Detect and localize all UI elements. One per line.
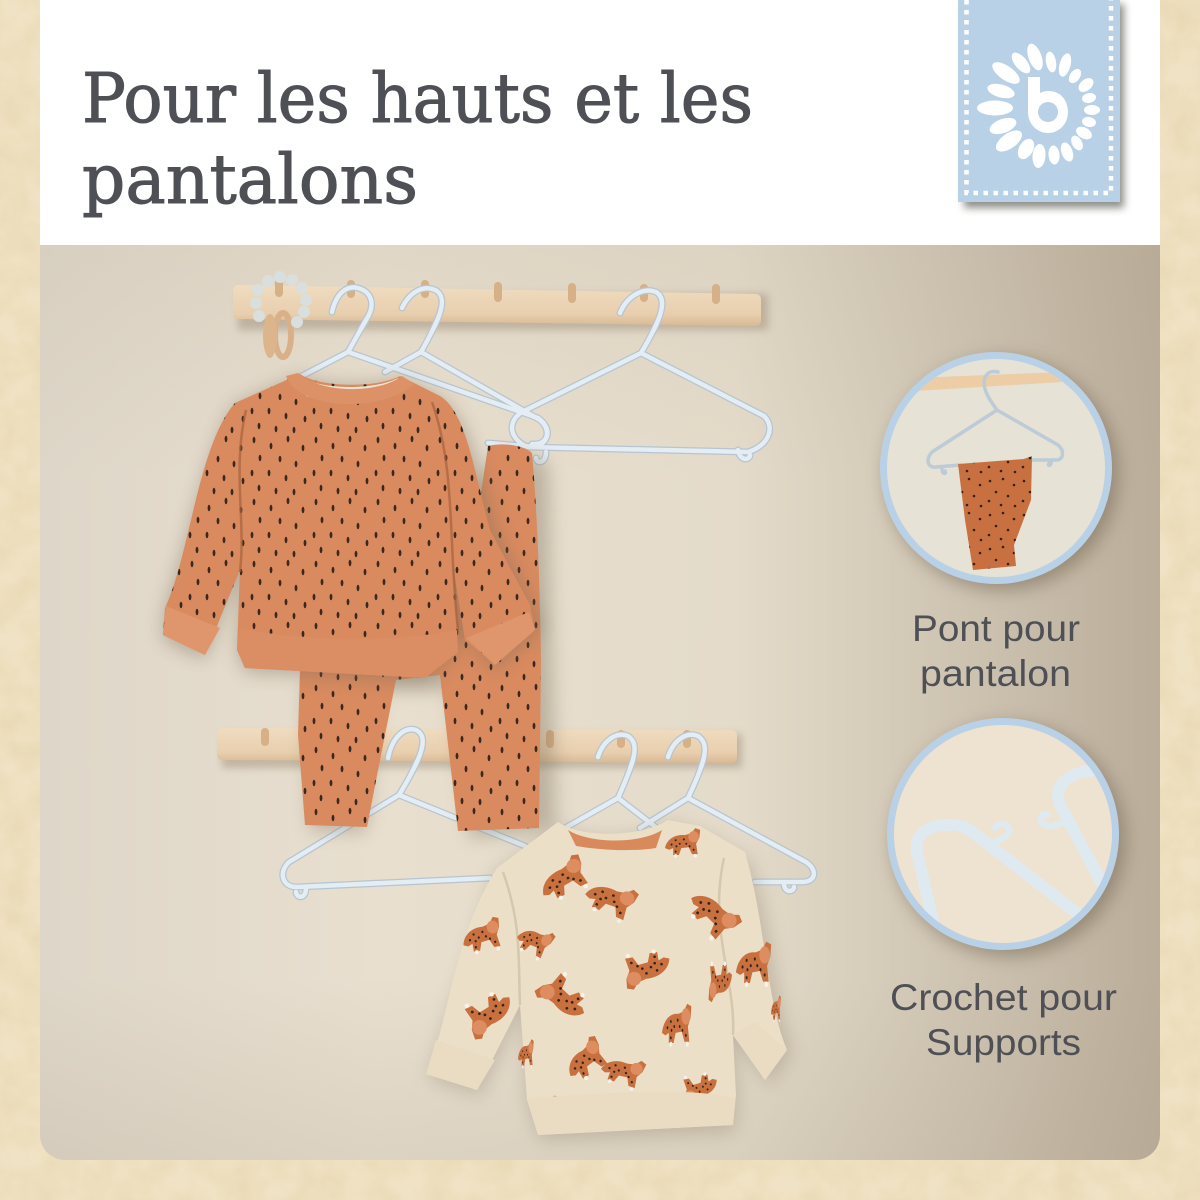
hanger [928,372,1062,473]
header panel [40,0,1160,246]
collar [306,378,398,398]
label: hook [890,977,1117,1063]
label: trouser bar: pantalon [920,653,1071,694]
right cuff [466,612,535,665]
sleeve seams [503,858,733,1035]
wooden rail [915,372,1062,391]
left cuff [163,606,220,655]
sleeve seams [240,402,458,630]
folded pants [958,456,1032,570]
orange sweater [163,373,540,682]
wooden rack: bottom [217,728,742,768]
label: trouser bar [915,616,1080,694]
detail circle: trouser bar [880,352,1118,590]
brand tag [958,0,1124,208]
hem [237,628,458,678]
detail circle: hook [887,718,1125,956]
wooden rack: top [233,279,768,330]
hem and cuffs [426,1034,780,1126]
label: hook: Crochet pour [890,977,1117,1018]
teether toy [250,271,312,358]
label: hook: Supports [926,1022,1081,1063]
orange pants [298,444,556,838]
title: Pour les hauts et les [82,60,753,139]
hanger right [1058,770,1103,885]
beige sweater [426,820,792,1140]
hanger left [917,825,1078,925]
label: trouser bar: Pont pour [912,608,1080,649]
collar [568,830,662,850]
title [82,60,753,220]
leopard prints [460,828,781,1107]
hangers: top rack [298,287,770,462]
icon: flower logo [977,42,1100,169]
title: pantalons [82,141,418,220]
photo panel [40,245,1160,1160]
hangers: bottom rack [283,729,814,897]
